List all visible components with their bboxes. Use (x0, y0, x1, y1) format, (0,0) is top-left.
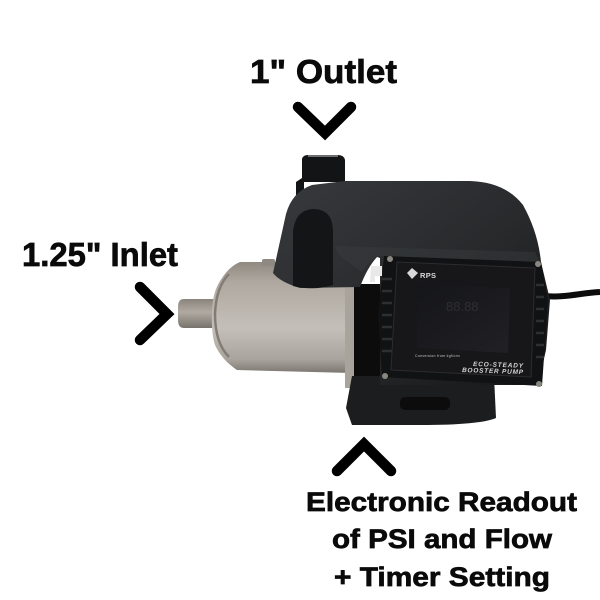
motor hood (273, 181, 550, 385)
outlet port (296, 155, 345, 195)
foot recess (400, 397, 450, 410)
conversion note: Conversion from kgf/cm² (415, 354, 461, 358)
right ridges (536, 285, 544, 357)
hood highlight (334, 246, 540, 272)
power cord (545, 292, 600, 296)
inlet stub (178, 299, 214, 328)
dark motor section (354, 284, 395, 392)
panel housing (378, 256, 548, 386)
panel face (391, 262, 535, 377)
arrow: readout chevron (337, 444, 391, 471)
line 2: of PSI and Flow (332, 524, 553, 554)
body bolt (262, 259, 275, 266)
screws (387, 256, 393, 262)
line 1: Electronic Readout (306, 487, 577, 517)
label: outlet: 1" Outlet (250, 53, 397, 90)
control panel (378, 256, 548, 387)
booster pump: BOOSTER PUMP (462, 367, 524, 376)
hood bulge (293, 209, 333, 288)
left ridges (382, 279, 392, 351)
white gap highlight (370, 266, 382, 282)
RPS logo: RPS (420, 271, 436, 280)
screen (417, 285, 510, 353)
RPS logo (407, 268, 436, 280)
digital readout: 88.88 (446, 299, 479, 314)
body rim (215, 274, 229, 357)
product name (462, 361, 524, 376)
pump illustration (178, 155, 600, 425)
label: electronic readout (306, 487, 577, 592)
rear collar (345, 285, 355, 388)
arrow: outlet chevron (298, 107, 351, 133)
arrow: inlet chevron (140, 287, 167, 340)
label: inlet: 1.25" Inlet (22, 236, 178, 273)
stainless pump body (212, 262, 352, 373)
line 3: + Timer Setting (334, 562, 550, 592)
logo mark (407, 268, 418, 279)
eco-steady: ECO-STEADY (473, 361, 524, 370)
base foot (346, 376, 496, 425)
